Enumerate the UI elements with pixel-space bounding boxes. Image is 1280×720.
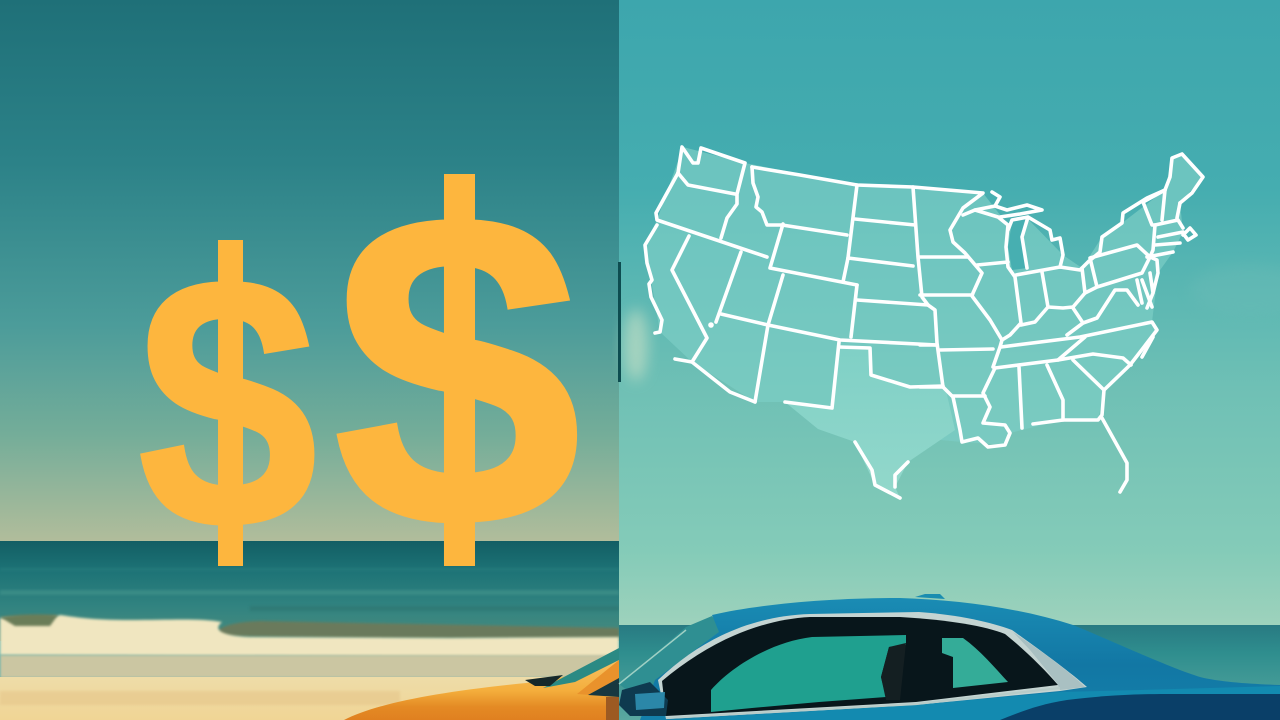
illustration: blue car	[619, 594, 1280, 720]
car seat	[881, 643, 906, 700]
wave	[218, 621, 619, 638]
map fill	[645, 147, 1203, 498]
car front side window	[711, 635, 906, 712]
panel: right sky and sea	[619, 0, 1280, 720]
yellow car windshield	[543, 648, 619, 688]
yellow car door	[606, 697, 619, 720]
map: state border lines	[645, 147, 1203, 498]
yellow car fender	[577, 660, 619, 695]
map: Lake Michigan	[1008, 218, 1028, 270]
yellow car window	[588, 678, 619, 697]
car rear side window	[942, 638, 1008, 688]
car lower body	[666, 686, 1280, 720]
car window chrome	[658, 612, 1087, 719]
panel: left beach scene	[0, 0, 619, 720]
car mirror	[619, 682, 668, 716]
car window interior	[662, 617, 1058, 716]
map: Texas lighter area	[785, 345, 955, 498]
foam	[0, 615, 619, 657]
icon: small dollar sign: $	[138, 202, 317, 604]
divider between panels	[618, 262, 621, 382]
map: Las Vegas dot	[708, 322, 714, 328]
illustration: yellow car at beach	[344, 648, 619, 720]
car windshield	[619, 616, 730, 700]
icon: large dollar sign: $	[334, 120, 581, 620]
car chrome triangle	[1013, 632, 1085, 690]
yellow car mirror	[525, 675, 563, 686]
map: United States state outlines	[645, 147, 1203, 498]
car body	[640, 598, 1280, 720]
